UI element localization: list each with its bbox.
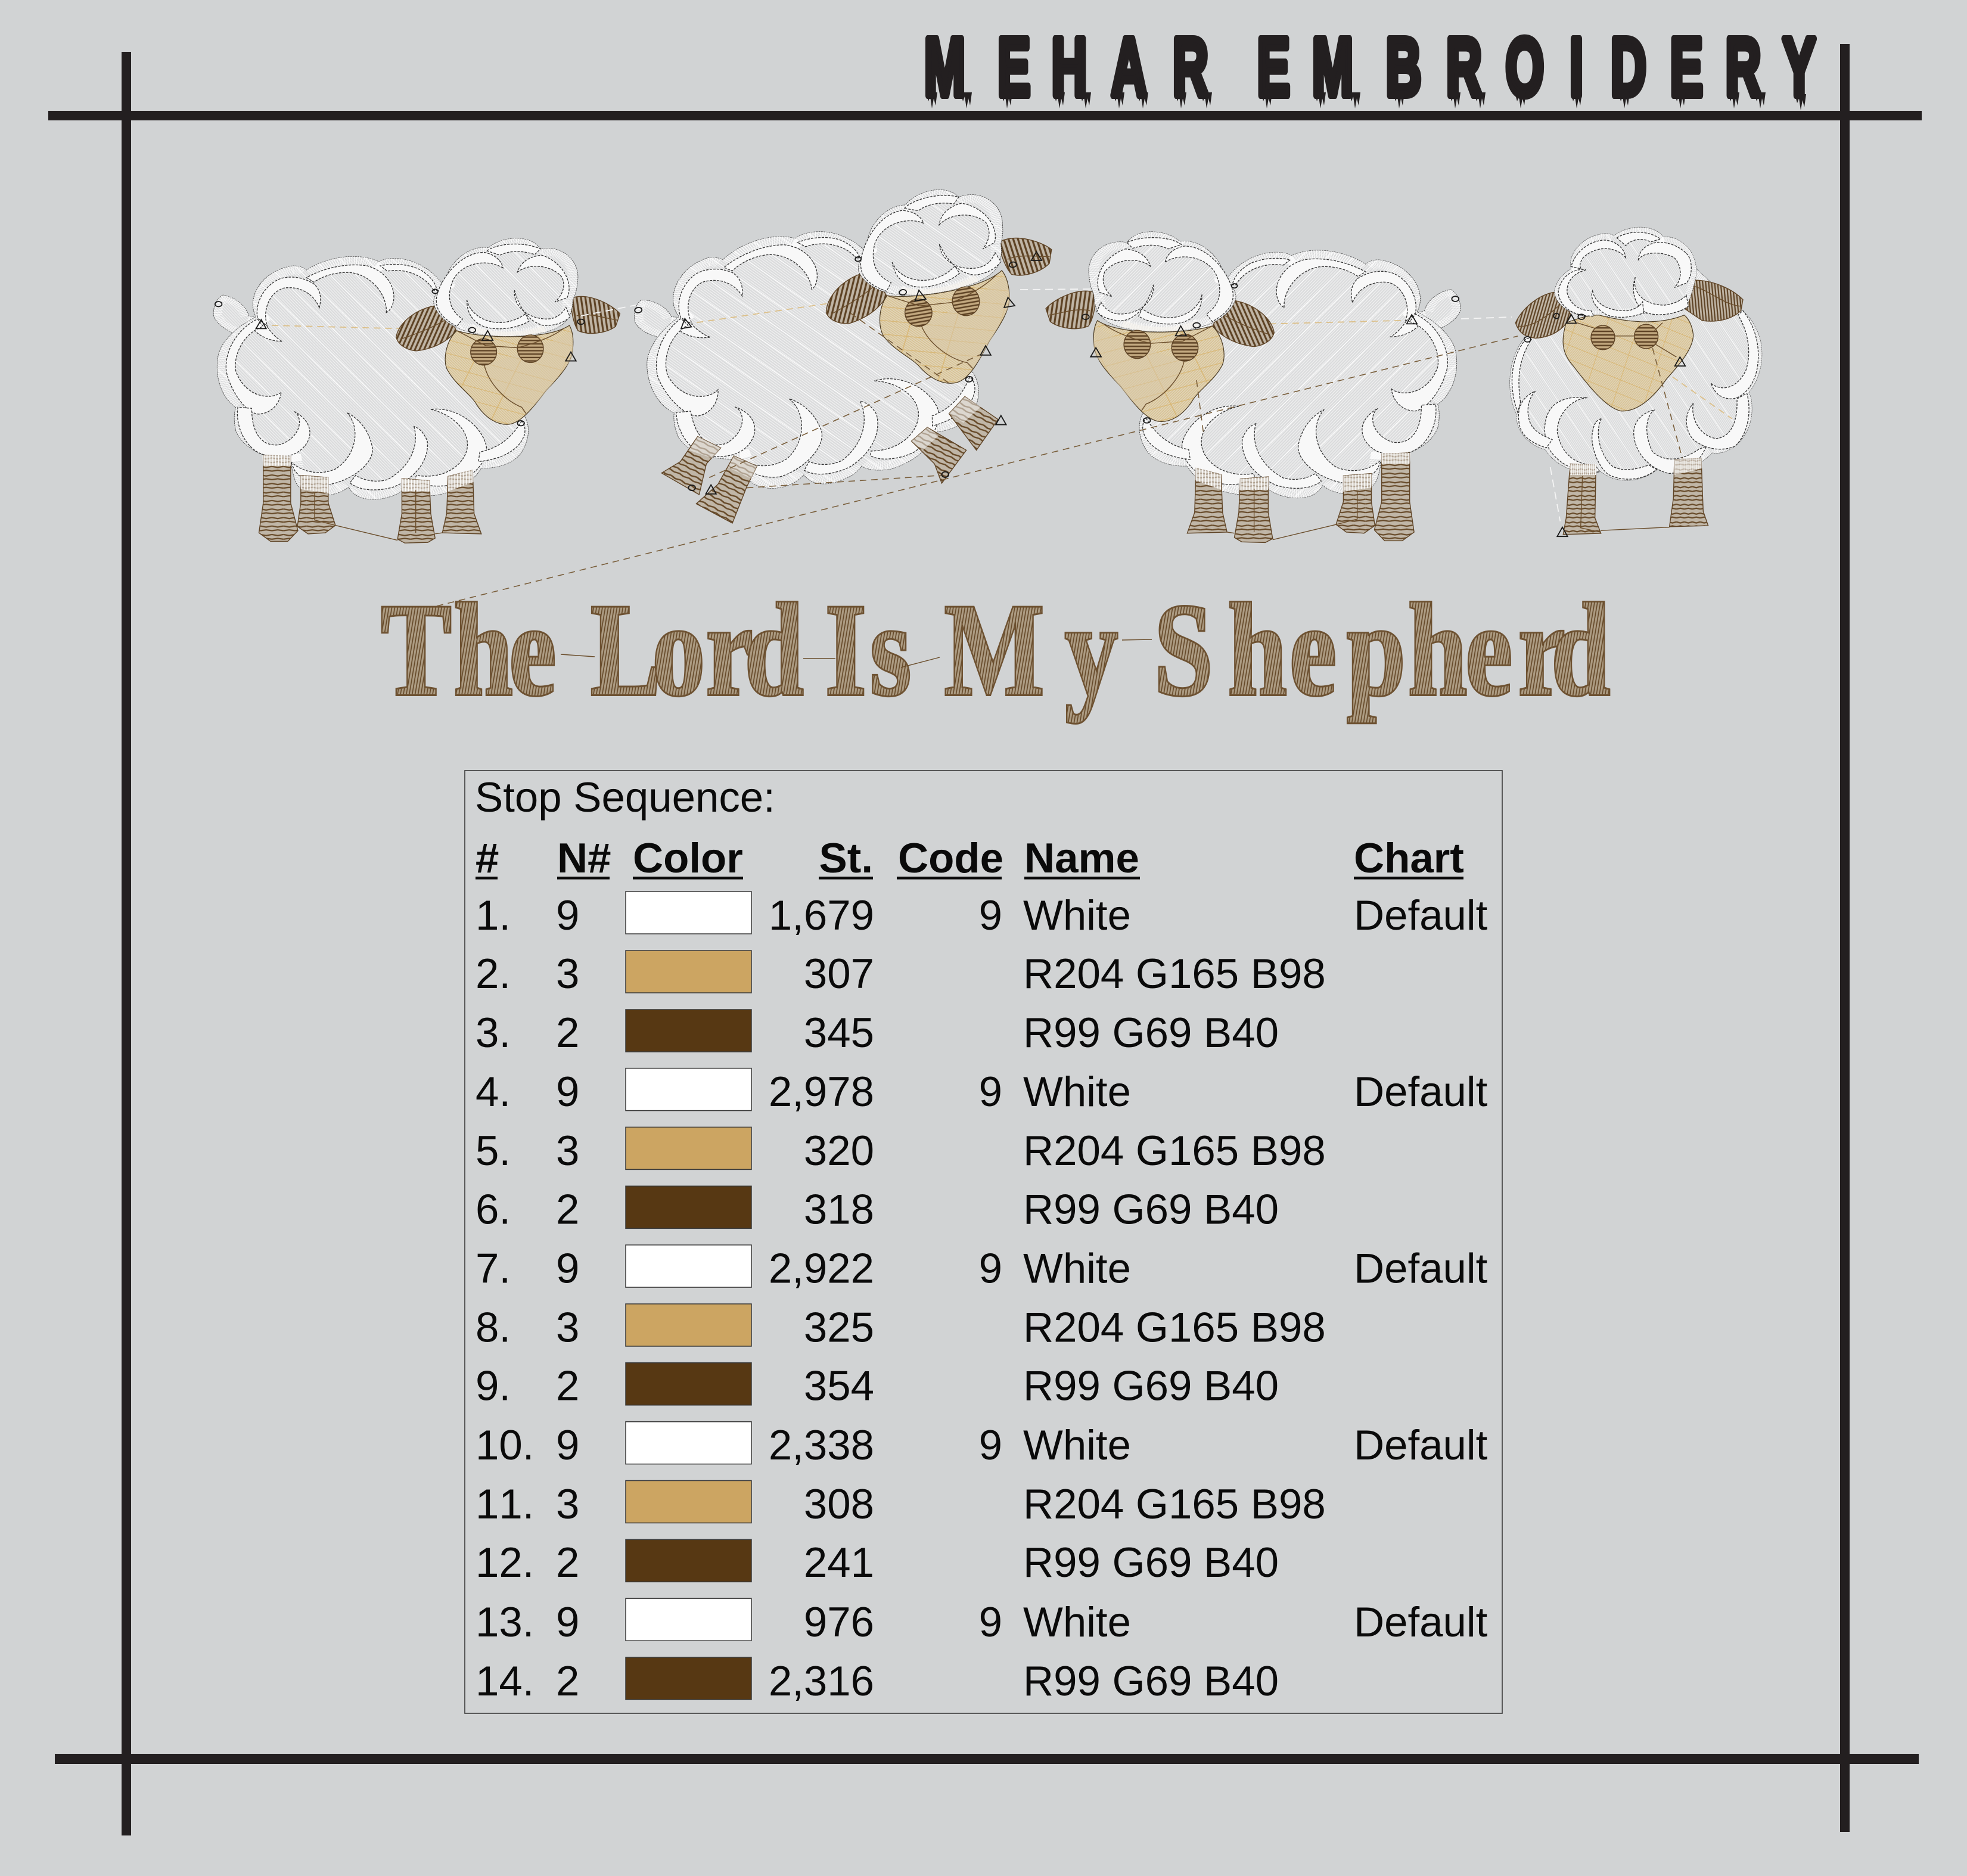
row 1: 1.	[476, 892, 511, 939]
row 7: 9	[556, 1246, 579, 1292]
table header: Chart	[1354, 835, 1464, 882]
row 5	[476, 1127, 1326, 1175]
row 3: 345	[804, 1010, 874, 1057]
row 3	[476, 1010, 1279, 1057]
row 1	[476, 892, 1488, 939]
row 4: 9	[979, 1069, 1002, 1116]
row 8: 325	[804, 1304, 874, 1352]
row 4: 4.	[476, 1069, 511, 1116]
row 13: 13.	[476, 1599, 534, 1646]
row 5: R204 G165 B98	[1023, 1128, 1326, 1175]
table header: N#	[557, 835, 611, 882]
row 13: White	[1023, 1599, 1131, 1646]
row 1: White	[1023, 892, 1131, 939]
row 2: 2.	[476, 951, 511, 998]
row 13: Default	[1354, 1599, 1488, 1646]
table header: Code	[898, 835, 1003, 882]
row 14: 2	[556, 1658, 579, 1705]
row 4: Default	[1354, 1069, 1488, 1116]
row 14: 14.	[476, 1658, 534, 1705]
row 7: Default	[1354, 1246, 1488, 1292]
row 9: 354	[804, 1362, 874, 1410]
sheep 2 legs	[661, 251, 1042, 523]
sheep 3 mirrored	[1046, 232, 1461, 542]
table header: Name	[1024, 835, 1139, 882]
row 4	[476, 1069, 1488, 1116]
row 8: R204 G165 B98	[1023, 1304, 1326, 1352]
row 6: R99 G69 B40	[1023, 1186, 1279, 1234]
row 3: 3.	[476, 1010, 511, 1057]
sheep 4 head	[1554, 227, 1696, 317]
row 1: 9	[979, 892, 1002, 939]
row 9: 9.	[476, 1362, 511, 1410]
table header: St.	[819, 835, 873, 882]
sheep 4 body	[1510, 269, 1762, 480]
jump thread lines between sheep and text	[437, 289, 1518, 606]
row 9: R99 G69 B40	[1023, 1362, 1279, 1410]
row 10: 10.	[476, 1422, 534, 1469]
row 13: 9	[556, 1599, 579, 1646]
row 4: White	[1023, 1069, 1131, 1116]
row 4: 2,978	[769, 1069, 874, 1116]
row 6	[476, 1186, 1279, 1234]
row 8: 8.	[476, 1304, 511, 1352]
table header: Color	[633, 835, 743, 882]
row 8	[476, 1304, 1326, 1352]
row 3: R99 G69 B40	[1023, 1010, 1279, 1057]
row 11	[476, 1480, 1326, 1528]
row 1: 9	[556, 892, 579, 939]
sheep 4 legs	[1563, 457, 1708, 535]
row 2: 3	[556, 951, 579, 998]
sheep 1	[213, 238, 620, 543]
row 1: 1,679	[769, 892, 874, 939]
row 10: White	[1023, 1422, 1131, 1469]
row 5: 3	[556, 1128, 579, 1175]
sheep 1 legs	[259, 455, 481, 543]
row 10	[476, 1422, 1488, 1469]
row 13: 976	[804, 1599, 874, 1646]
row 7: 2,922	[769, 1246, 874, 1292]
panel heading: Stop Sequence:	[475, 774, 775, 821]
sheep 2 body and head	[622, 172, 1084, 511]
sheep 3 body and head	[1046, 232, 1461, 498]
sheep 4 ears	[1515, 280, 1743, 338]
row 10: 9	[979, 1422, 1002, 1469]
row 2: R204 G165 B98	[1023, 951, 1326, 998]
row 11: 11.	[476, 1481, 534, 1528]
table header	[476, 835, 1464, 882]
row 1: Default	[1354, 892, 1488, 939]
row 7	[476, 1245, 1488, 1292]
row 10: 2,338	[769, 1422, 874, 1469]
title: Mehar Embroidery: MEHAR EMBROIDERY	[924, 21, 1816, 113]
row 14: 2,316	[769, 1658, 874, 1705]
sheep 4 jump lines and markers	[1524, 313, 1732, 536]
row 7: 7.	[476, 1246, 511, 1292]
sheep 2 jumping	[622, 172, 1084, 523]
sheep 4 front view	[1510, 227, 1762, 536]
row 9: 2	[556, 1362, 579, 1410]
row 11: 308	[804, 1481, 874, 1528]
row 8: 3	[556, 1304, 579, 1352]
row 10: 9	[556, 1422, 579, 1469]
row 5: 320	[804, 1128, 874, 1175]
row 2	[476, 951, 1326, 998]
stop sequence panel	[465, 771, 1502, 1713]
row 12: 12.	[476, 1539, 534, 1586]
row 6: 2	[556, 1186, 579, 1234]
row 9	[476, 1362, 1279, 1410]
panel border	[465, 771, 1502, 1713]
sheep 4 face	[1558, 269, 1693, 411]
row 14	[476, 1657, 1279, 1705]
row 13: 9	[979, 1599, 1002, 1646]
row 12: 2	[556, 1539, 579, 1586]
row 12: R99 G69 B40	[1023, 1539, 1279, 1586]
row 6: 6.	[476, 1186, 511, 1234]
row 3: 2	[556, 1010, 579, 1057]
row 7: White	[1023, 1246, 1131, 1292]
row 4: 9	[556, 1069, 579, 1116]
row 12: 241	[804, 1539, 874, 1586]
stitched phrase: The Lord Is My Shepherd: The Lord Is My Shepherd	[381, 577, 1610, 723]
row 13	[476, 1598, 1488, 1646]
row 14: R99 G69 B40	[1023, 1658, 1279, 1705]
row 11: 3	[556, 1481, 579, 1528]
row 12	[476, 1539, 1279, 1586]
row 7: 9	[979, 1246, 1002, 1292]
sheep 1 body and head	[213, 238, 620, 499]
row 11: R204 G165 B98	[1023, 1481, 1326, 1528]
row 5: 5.	[476, 1128, 511, 1175]
table header: #	[476, 835, 499, 882]
row 2: 307	[804, 951, 874, 998]
row 6: 318	[804, 1186, 874, 1234]
sheep 3 legs	[1187, 453, 1414, 542]
row 10: Default	[1354, 1422, 1488, 1469]
